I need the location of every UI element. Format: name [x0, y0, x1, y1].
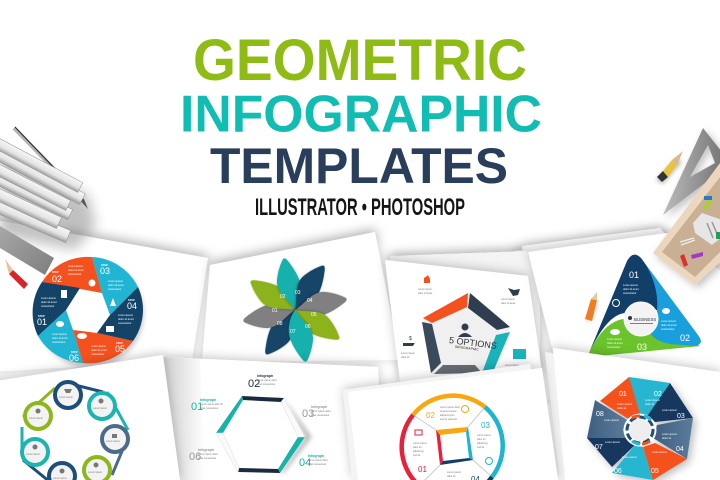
inner square [436, 427, 468, 435]
label 03: 03 [302, 408, 314, 420]
segment 02: dolor sit amet [68, 268, 84, 272]
blade 01 [600, 377, 640, 420]
frame shadow [238, 398, 312, 473]
infographic: four-part circular frame: sit amet consec [440, 410, 457, 413]
label 03: Infograph [311, 405, 327, 409]
blade 02 [629, 377, 670, 415]
infographic: eight-blade octagon: Lorem ipsum [662, 432, 677, 436]
circle: left [22, 439, 48, 465]
infographic: eight-blade octagon: dolor sit [662, 436, 671, 440]
circle: right [102, 426, 128, 452]
segment 05: 05 [115, 344, 125, 354]
top bar [242, 396, 284, 402]
infographic: eight-petal flower: 04 [307, 298, 313, 304]
infographic: eight-blade octagon: Lorem ipsum [645, 398, 660, 402]
pencil shadow [656, 158, 682, 184]
infographic: eight-blade octagon: 07 [595, 444, 603, 451]
icons [462, 406, 468, 412]
icon: briefcase [513, 349, 526, 359]
infographic: eight-petal flower: 03 [295, 290, 301, 296]
infographic: triangle with three segments: dolor sit amet [661, 323, 677, 327]
segment 04: Lorem ipsum [118, 313, 133, 317]
infographic: five options pentagon: dolor sit amet [418, 292, 433, 295]
back paper: stack behind triangle [514, 228, 720, 400]
infographic: four-part circular frame: adipiscing [477, 442, 488, 445]
infographic: four-part circular frame: Lorem ipsum [477, 434, 491, 437]
label 04: Lorem ipsum dolor [308, 459, 328, 462]
title line 1: GEOMETRIC [193, 28, 527, 93]
center label: BUSINESS [634, 317, 656, 322]
infographic: five options pentagon: dolor sit [401, 356, 410, 359]
infographic: eight-petal flower: 06 [305, 324, 311, 330]
segment 01: STEP [38, 314, 45, 318]
label 01: Infograph [200, 398, 216, 402]
infographic: five options pentagon: Lorem ipsum [418, 288, 432, 291]
label 01: 01 [191, 401, 203, 413]
segment 03: dolor sit amet [108, 283, 124, 287]
segment 01: Lorem ipsum [41, 296, 56, 300]
label 04: Infograph [308, 454, 324, 458]
blade 05 [643, 443, 687, 480]
label 03: Lorem ipsum dolor [311, 410, 331, 413]
circle: lower right [84, 457, 110, 480]
infographic: eight-blade octagon: dolor sit [645, 402, 654, 406]
segment 06: dolor sit amet [52, 336, 68, 340]
back paper: stack behind pentagon [390, 251, 540, 378]
ruler [0, 226, 54, 275]
segment 03: 03 [100, 266, 110, 276]
segment 06: consectetur [52, 340, 66, 344]
infographic: seven circle ring: Lorem ipsum [53, 477, 67, 480]
infographic: four-part circular frame: sed do [413, 454, 421, 457]
infographic: eight-blade octagon: Lorem ipsum [617, 402, 632, 406]
label 02: amet consectetur [257, 383, 276, 386]
drafting tools: left [0, 127, 96, 289]
infographic: triangle with three segments: Lorem ipsum [607, 337, 622, 341]
paper: flower template [202, 232, 400, 362]
infographic: five options pentagon: Lorem ipsum [505, 364, 519, 367]
paper: triangle template [528, 233, 720, 372]
segment 01: 01 [37, 317, 47, 327]
infographic: five options pentagon: Lorem ipsum [501, 298, 515, 301]
center label: 5 OPTIONS [449, 335, 497, 351]
white side bars [281, 398, 305, 437]
label 01 [191, 398, 223, 413]
infographic: eight-blade octagon: 04 [676, 446, 684, 453]
infographic: triangle with three segments [589, 255, 701, 357]
infographic: four-part circular frame: dolor sit [477, 438, 486, 441]
segment 02: STEP [52, 270, 59, 274]
paper: ring template [0, 219, 208, 372]
infographic: seven circle ring [22, 382, 128, 480]
segment 06: 06 [69, 353, 79, 363]
segment 01: dolor sit amet [41, 300, 57, 304]
infographic: triangle with three segments: Lorem ipsum [661, 319, 676, 323]
segment 06: Lorem ipsum [52, 332, 67, 336]
segment 02: Lorem ipsum [68, 264, 83, 268]
label 01: amet consectetur [200, 407, 219, 410]
segment 06: STEP [71, 350, 78, 354]
circle: top [55, 382, 81, 408]
pen [14, 127, 58, 172]
paper: heptagon template [0, 355, 180, 480]
infographic: four-part circular frame: Lorem ipsum [413, 442, 427, 445]
infographic: triangle with three segments: 03 [637, 342, 647, 352]
infographic: eight-petal flower [243, 258, 347, 362]
infographic: five options pentagon: Lorem ipsum [401, 352, 415, 355]
infographic: eight-blade octagon: 05 [651, 468, 659, 475]
infographic: seven circle ring: Lorem ipsum [93, 407, 107, 410]
title [180, 28, 542, 221]
label 06: Lorem ipsum dolor [198, 453, 218, 456]
circle: upper left [25, 403, 51, 429]
infographic: seven circle ring: Lorem ipsum [29, 417, 43, 420]
infographic: eight-petal flower: 07 [290, 329, 296, 335]
label 06 [189, 448, 218, 463]
step numbers: 01 [619, 391, 627, 398]
infographic: eight-blade octagon: Lorem ipsum [662, 408, 677, 412]
captions: Lorem ipsum dolor [440, 406, 460, 409]
label 04: amet consectetur [308, 463, 327, 466]
infographic: eight-blade octagon: dolor sit [617, 406, 626, 410]
segment 04 [97, 287, 143, 341]
infographic: five options pentagon: INFOGRAPHIC [455, 345, 479, 352]
circle: bottom [49, 463, 75, 480]
bottom bar [238, 468, 280, 473]
infographic: triangle with three segments: dolor sit amet [607, 341, 623, 345]
label 03: amet consectetur [311, 414, 330, 417]
icons [612, 300, 620, 306]
lower right teal bar [278, 437, 305, 473]
blade 07 [587, 438, 635, 467]
label 02: 02 [248, 378, 260, 390]
infographic: triangle with three segments: 02 [680, 333, 690, 343]
circle: upper right [89, 393, 115, 419]
infographic: triangle with three segments: dolor sit amet [623, 287, 639, 291]
infographic: triangle with three segments: Lorem ipsum [623, 283, 638, 287]
icon: orange pencil [585, 292, 598, 322]
icon: handshake [508, 288, 520, 296]
red pencil [5, 259, 28, 289]
icon: hand and coin [403, 341, 416, 346]
label 06: amet consectetur [198, 457, 217, 460]
infographic: seven circle ring: Lorem ipsum [59, 396, 73, 399]
label 04 [299, 454, 328, 469]
infographic: eight-blade octagon: Lorem ipsum [652, 450, 667, 454]
title line 2: INFOGRAPHIC [180, 86, 542, 144]
shadow [0, 150, 96, 250]
segment 02: consectetur [68, 272, 82, 276]
blade 03 [647, 383, 693, 422]
blade 06 [612, 445, 653, 480]
infographic: triangle with three segments: consectetur [607, 345, 621, 349]
infographic: four-part circular frame: dolor sit [413, 446, 422, 449]
infographic: triangle with three segments: consectetur [661, 327, 675, 331]
infographic: five options pentagon: dolor sit amet [501, 302, 516, 305]
title line 3: TEMPLATES [210, 138, 508, 194]
infographic: seven circle ring: Lorem ipsum [26, 453, 40, 456]
infographic: four-part circular frame: Lorem ipsum [447, 471, 461, 474]
infographic: eight-blade octagon: 08 [596, 411, 604, 418]
set square [663, 128, 720, 215]
segment labels: 01 [629, 270, 639, 280]
infographic: six-step ring [33, 257, 144, 368]
infographic: four-part circular frame: sed do [477, 446, 485, 449]
label 03 [302, 405, 331, 420]
upper left teal bar [216, 396, 243, 433]
segment 05: STEP [116, 341, 123, 345]
blade 04 [653, 418, 693, 459]
paper: octagon template stack [545, 348, 720, 480]
box contents [693, 213, 720, 245]
segment 05 [73, 330, 133, 363]
infographic: triangle with three segments: consectetur [623, 291, 637, 295]
label 02 [248, 374, 277, 390]
segment 02 [42, 257, 102, 293]
infographic: eight-blade octagon: 02 [654, 391, 662, 398]
segment 03 [92, 257, 138, 315]
segment 04: 04 [127, 301, 137, 311]
segment 06 [38, 310, 83, 363]
segment 04: dolor sit amet [118, 317, 134, 321]
segment 04: STEP [128, 298, 135, 302]
infographic: eight-blade octagon: 03 [677, 413, 685, 420]
infographic: seven circle ring: Lorem ipsum [106, 440, 120, 443]
segment 04: consectetur [118, 321, 132, 325]
icon: person [458, 324, 472, 337]
infographic: four-part circular frame: sed do eiusmod [440, 418, 458, 421]
pencil [657, 151, 683, 182]
infographic: eight-blade octagon: Lorem ipsum [605, 440, 620, 444]
label 06: Infograph [198, 448, 214, 452]
infographic: eight-petal flower: 02 [280, 294, 286, 300]
segment 05: dolor sit amet [91, 348, 107, 352]
segment 01: consectetur [41, 304, 55, 308]
numbers: 02 [426, 411, 435, 420]
segment 05: consectetur [91, 352, 105, 356]
label 06: 06 [189, 451, 201, 463]
outer arcs [413, 396, 485, 415]
subtitle: ILLUSTRATOR • PHOTOSHOP [255, 194, 465, 221]
icon: chart [424, 275, 430, 283]
paper: hexagon template [163, 357, 384, 480]
soft shadow behind paper stack [65, 230, 668, 270]
infographic: eight-petal flower: 08 [277, 321, 283, 327]
pen tip [76, 196, 88, 209]
infographic: eight-petal flower: 05 [311, 312, 317, 318]
label 02: Infograph [257, 374, 273, 378]
segment 02: 02 [52, 274, 62, 284]
segment 01 [33, 282, 80, 336]
infographic: five options pentagon: $ [409, 336, 412, 342]
segment 03: STEP [101, 263, 108, 267]
infographic: four-part circular frame: dolor sit [447, 475, 456, 478]
label 04: 04 [299, 457, 311, 469]
segment 05: Lorem ipsum [91, 344, 106, 348]
infographic: eight-petal flower: 01 [272, 308, 278, 314]
drafting tools: right [653, 128, 720, 285]
infographic: four-part circular frame: adipiscing [413, 450, 424, 453]
blade 08 [587, 400, 627, 438]
infographic: eight-blade octagon: Lorem ipsum [622, 455, 637, 459]
infographic: seven circle ring: Lorem ipsum [88, 471, 102, 474]
infographic: five options pentagon [401, 275, 526, 374]
center ring [624, 414, 656, 446]
infographic: hexagon frame [189, 374, 331, 473]
infographic: four-part circular frame: 03 [481, 421, 490, 430]
paper: pentagon template [385, 260, 542, 382]
infographic: eight-blade octagon: Lorem ipsum [604, 418, 619, 422]
infographic: eight-blade octagon [587, 377, 693, 480]
segment 03: consectetur [108, 287, 122, 291]
paper: red ring template stack [343, 364, 558, 480]
rolled rulers [0, 131, 85, 243]
label 01: Lorem ipsum dolor sit [200, 403, 223, 406]
infographic: four-part circular frame: adipiscing elit [440, 414, 455, 417]
segment 03: Lorem ipsum [108, 279, 123, 283]
infographic: four-part circular frame: 01 [418, 465, 427, 474]
wooden box [653, 163, 720, 285]
infographic: four-part circular frame [402, 396, 503, 480]
infographic: eight-blade octagon: 06 [614, 468, 622, 475]
label 02: Lorem ipsum dolor [257, 379, 277, 382]
